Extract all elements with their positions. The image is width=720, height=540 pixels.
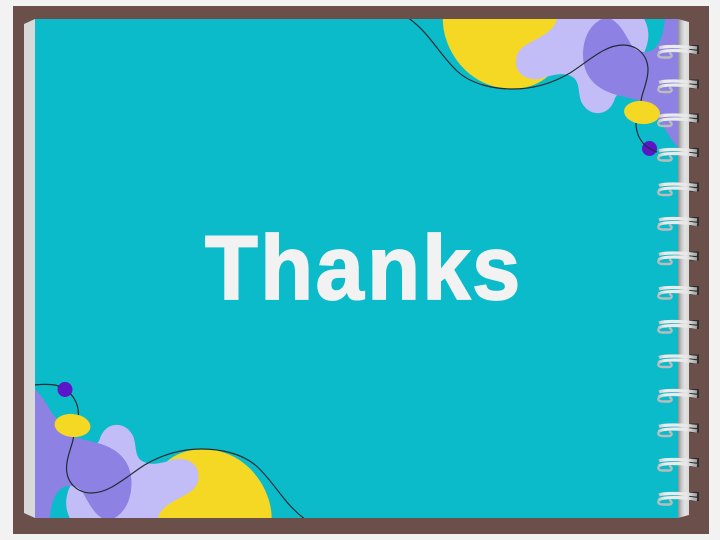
left page edge [24, 19, 35, 518]
decoration: bottom left corner blobs [34, 382, 308, 521]
right page edge [678, 19, 689, 518]
spiral binding [658, 45, 699, 504]
title: Thanks: Thanks [205, 217, 520, 318]
decoration: top right corner blobs [407, 17, 680, 156]
